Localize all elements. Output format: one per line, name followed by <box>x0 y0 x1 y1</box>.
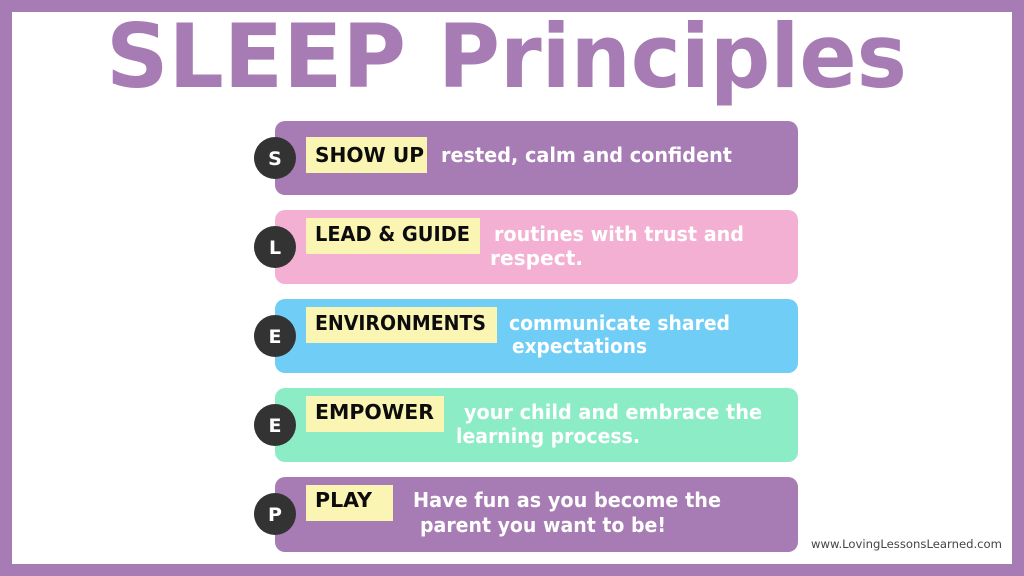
badge: P <box>254 493 296 535</box>
badge: S: S <box>268 148 282 170</box>
badge: L: L <box>269 237 281 259</box>
description: environments: communicate shared <box>509 311 730 335</box>
badge: E: E <box>269 326 281 348</box>
description: lead and guide: respect. <box>490 246 583 270</box>
label: play <box>306 485 393 521</box>
title: Principles <box>438 5 907 108</box>
panel: P play <box>254 477 798 552</box>
panel: S show up <box>254 121 798 195</box>
badge: E: E <box>269 415 281 437</box>
title <box>106 5 907 108</box>
badge: E <box>254 315 296 357</box>
label: environments <box>306 307 497 343</box>
description: show up: rested, calm and confident <box>441 143 732 167</box>
panel: L lead and guide <box>254 210 798 284</box>
label: lead and guide <box>306 218 480 254</box>
label: show up: SHOW UP <box>315 143 424 167</box>
label: lead and guide: LEAD & GUIDE <box>315 222 470 246</box>
description: empower: learning process. <box>456 424 640 448</box>
panel: E environments <box>254 299 798 373</box>
description: play: Have fun as you become the <box>413 488 721 512</box>
badge: S <box>254 137 296 179</box>
label: play: PLAY <box>315 488 373 512</box>
description: play: parent you want to be! <box>420 513 666 537</box>
description: environments: expectations <box>512 334 647 358</box>
label: empower: EMPOWER <box>315 400 434 424</box>
description: empower: your child and embrace the <box>464 400 762 424</box>
label: environments: ENVIRONMENTS <box>315 311 486 335</box>
badge: P: P <box>268 504 282 526</box>
description: play <box>413 488 721 537</box>
badge: L <box>254 226 296 268</box>
label: show up <box>306 137 427 173</box>
description: environments <box>509 311 730 358</box>
panel: E empower <box>254 388 798 462</box>
label: empower <box>306 396 444 432</box>
description: empower <box>456 400 762 448</box>
description: lead and guide: routines with trust and <box>494 222 744 246</box>
website credit: www.LovingLessonsLearned.com <box>811 537 1002 551</box>
badge: E <box>254 404 296 446</box>
description: lead and guide <box>490 222 744 270</box>
title: SLEEP <box>106 5 406 108</box>
